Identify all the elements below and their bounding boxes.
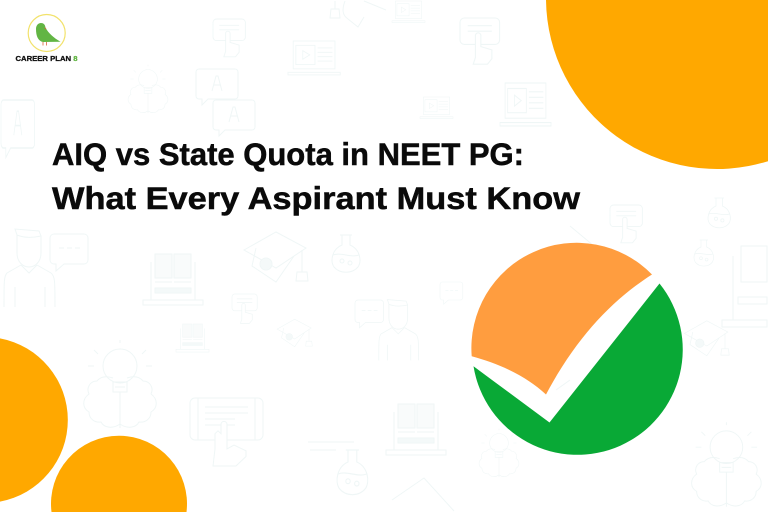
decorative circle: bottom left large (0, 338, 68, 502)
title (52, 136, 581, 216)
logo bird (36, 23, 60, 42)
orange segment (471, 243, 652, 394)
decorative circle: bottom left small (51, 436, 187, 512)
title line 1: AIQ vs State Quota in NEET PG: (52, 136, 524, 172)
decorative circle: top right (546, 0, 768, 169)
logo wordmark: CAREER PLAN 8 (16, 54, 78, 63)
NEET check mark logo (471, 243, 683, 455)
logo bird legs (43, 42, 46, 46)
title line 2: What Every Aspirant Must Know (52, 180, 581, 216)
green segment (474, 284, 683, 455)
logo bird beak (44, 27, 46, 29)
logo: Career Plan B (16, 14, 78, 63)
logo ring (28, 14, 65, 52)
